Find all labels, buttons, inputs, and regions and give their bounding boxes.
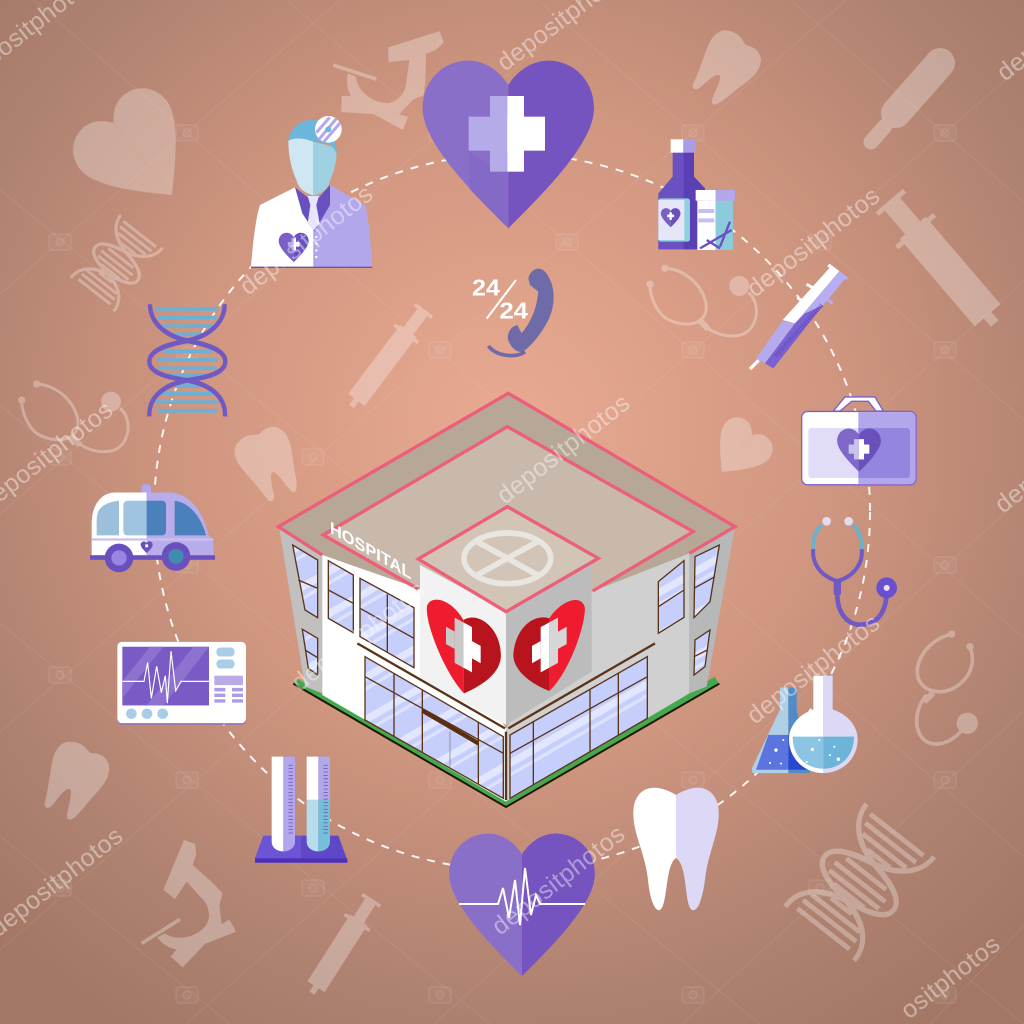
storefront right	[510, 657, 647, 798]
telephone 24/24	[472, 269, 554, 356]
windows right side	[658, 545, 719, 675]
faint stethoscope right	[917, 630, 978, 744]
faint syringe centre left	[339, 300, 437, 416]
windows left side	[293, 545, 414, 675]
dashed circle	[154, 154, 870, 870]
tower faces	[420, 558, 592, 725]
red heart right	[513, 600, 585, 691]
faint stethoscope upper right	[646, 265, 756, 336]
tower top with helipad	[418, 507, 598, 612]
sign: HOSPITAL: HOSPITAL	[330, 518, 411, 584]
faint microscope top	[315, 0, 473, 153]
telephone 24/24: 24	[499, 297, 528, 323]
brown canopy lines	[357, 643, 655, 800]
heart monitor	[117, 642, 246, 725]
big heart with cross	[423, 61, 594, 228]
faint heart centre right	[700, 411, 779, 490]
syringe	[750, 265, 847, 369]
stethoscope	[813, 517, 897, 625]
faint stethoscope left	[18, 380, 128, 452]
telephone 24/24: 24	[472, 274, 500, 300]
medicine bottle and jar	[658, 139, 735, 250]
depositphotos watermarks: ositphotos	[895, 930, 1006, 1024]
depositphotos watermarks: depositphotos	[286, 576, 430, 697]
storefront left	[365, 657, 503, 798]
big white tooth	[633, 788, 719, 910]
faint microscope bottom left	[142, 840, 236, 967]
faint heart top left	[61, 76, 215, 230]
roof	[278, 393, 735, 612]
first aid kit	[802, 397, 916, 485]
faint syringe bottom	[299, 891, 385, 1001]
faint dna bottom right	[785, 803, 935, 961]
faint dna left	[71, 215, 163, 311]
dna helix	[149, 304, 225, 416]
doctor	[251, 116, 372, 268]
depositphotos watermarks: depositphotos	[234, 180, 378, 301]
ground	[293, 677, 719, 807]
zoomed region: top icons	[423, 61, 735, 356]
faint tooth top right	[681, 24, 768, 114]
bottom heart with ECG	[449, 834, 595, 976]
watermark camera marks	[49, 125, 956, 1003]
ambulance	[90, 484, 215, 572]
test tubes	[255, 757, 347, 863]
faint tooth centre left	[229, 421, 310, 509]
faint tooth bottom left	[32, 736, 115, 827]
red heart left	[427, 600, 501, 693]
faint large syringe right	[870, 184, 1014, 340]
depositphotos watermarks: depositphotos	[486, 820, 630, 941]
flasks	[752, 676, 858, 773]
walls	[279, 527, 735, 802]
hospital building	[278, 393, 735, 807]
depositphotos watermarks: depositphotos	[741, 609, 885, 730]
depositphotos watermarks: depositphotos	[741, 182, 885, 303]
depositphotos watermarks: depositphotos	[491, 389, 635, 510]
faint pipette top right	[871, 63, 940, 142]
zoomed region: right icons	[752, 397, 916, 773]
zoomed region: left icons	[90, 304, 347, 863]
